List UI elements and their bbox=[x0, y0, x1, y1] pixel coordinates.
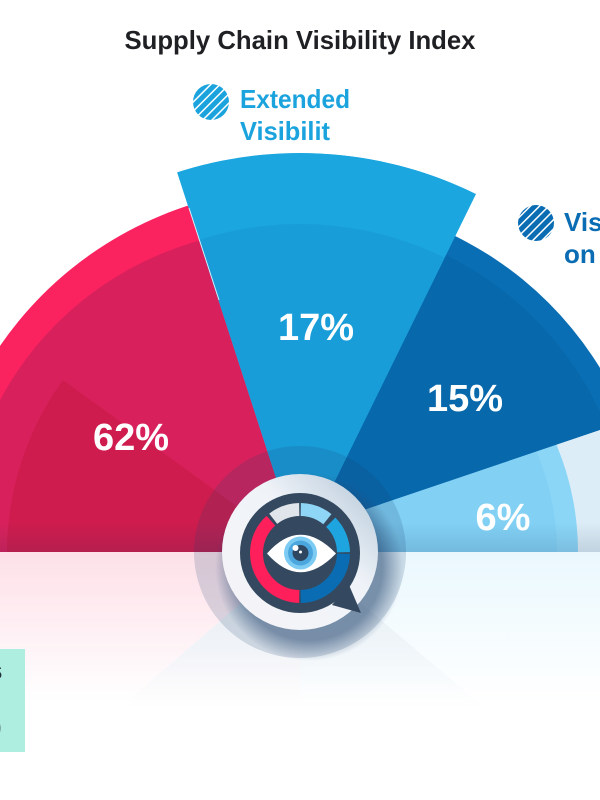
segment: 17 percent blue bbox=[177, 153, 476, 482]
segment: pale remainder bbox=[556, 430, 600, 552]
callout box cropped bbox=[0, 649, 25, 752]
value: 17 percent: 17% bbox=[278, 307, 354, 349]
segment: 62 percent pink bbox=[0, 206, 276, 552]
badge disc bbox=[222, 474, 378, 630]
label: visibility on: on bbox=[564, 239, 596, 269]
value: 62 percent: 62% bbox=[93, 417, 169, 459]
label: extended visibility: Extended bbox=[240, 84, 350, 114]
badge shadow bbox=[215, 473, 403, 661]
title: Supply Chain Visibility Index bbox=[124, 25, 476, 55]
badge dark ring bbox=[240, 493, 361, 613]
icon: eye badge bbox=[215, 473, 403, 661]
icon: striped circle visibility bbox=[518, 205, 554, 241]
icon: striped circle extended bbox=[193, 84, 229, 120]
label: extended visibility: Visibilit bbox=[240, 116, 330, 146]
value: 15 percent: 15% bbox=[427, 378, 503, 420]
reflection below chart bbox=[0, 552, 600, 712]
chart: semicircle segments bbox=[0, 153, 600, 552]
donut segments bbox=[238, 491, 362, 615]
eye bbox=[267, 535, 336, 572]
central halo bbox=[194, 446, 406, 658]
value: 6 percent: 6% bbox=[476, 497, 530, 539]
legend: visibility on bbox=[518, 205, 600, 269]
segment: 15 percent dark blue bbox=[334, 236, 600, 510]
legend: extended visibility bbox=[193, 84, 350, 146]
segment: 6 percent light blue bbox=[366, 444, 578, 552]
